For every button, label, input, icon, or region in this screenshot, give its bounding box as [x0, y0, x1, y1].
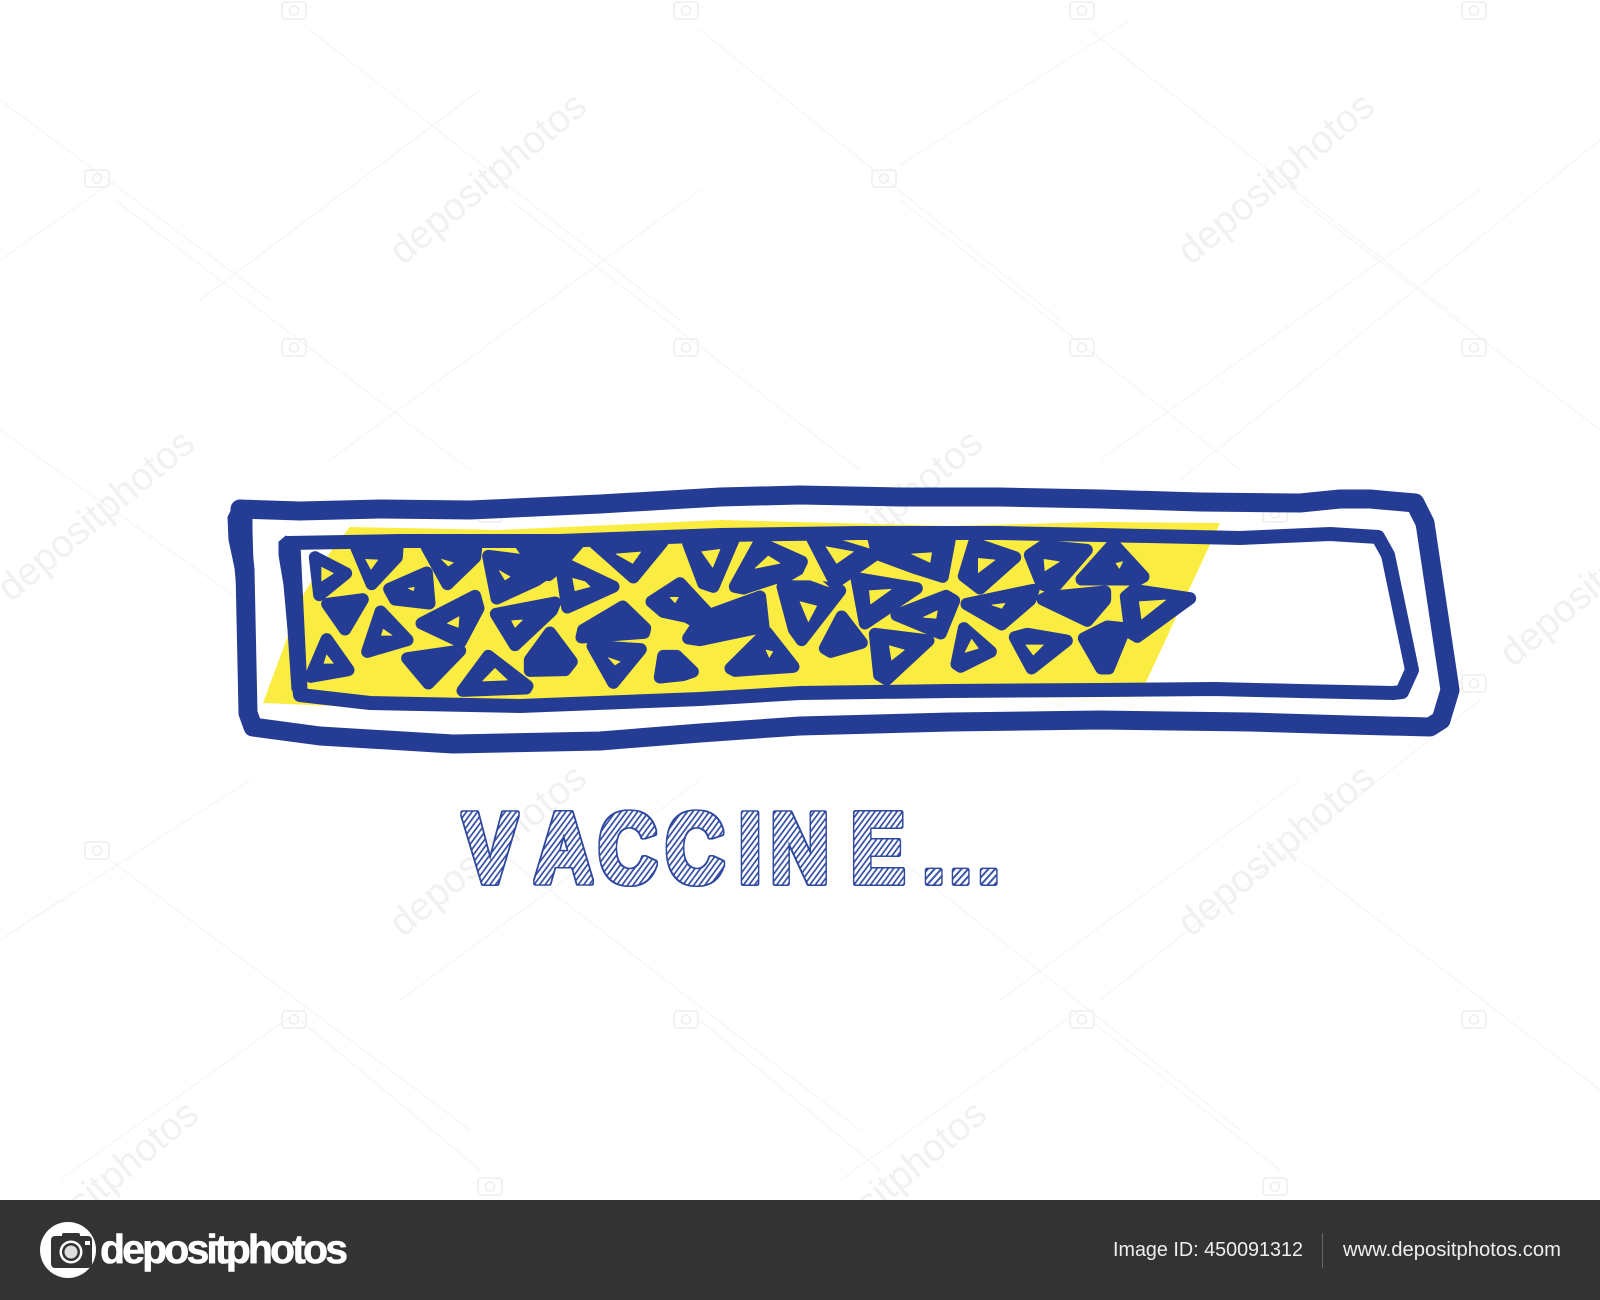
label: VACCINE: ...: [924, 819, 998, 897]
watermark layer: depositphotos: [381, 84, 595, 273]
yellow progress fill: [263, 520, 1220, 707]
watermark layer: depositphotos: [781, 1092, 995, 1281]
logo wordmark: depositphotos: [100, 1226, 348, 1272]
watermark layer: depositphotos: [777, 421, 991, 610]
virus holes: left half: [322, 549, 720, 681]
watermark layer: depositphotos: [381, 756, 595, 945]
image id: Image ID: 450091312: [1113, 1239, 1303, 1261]
progress bar: [228, 495, 1450, 744]
virus cluster: left half: [311, 540, 763, 691]
watermark layer: depositphotos: [1169, 84, 1383, 273]
label: VACCINE: VACCINE: [463, 793, 905, 903]
outer hand-drawn frame: [228, 495, 1450, 744]
virus cluster: right half: [731, 537, 1190, 679]
footer bar: [0, 1200, 1600, 1300]
watermark layer: depositphotos: [1169, 756, 1383, 945]
website url: www.depositphotos.com: [1342, 1239, 1561, 1261]
inner hand-drawn frame: [279, 533, 1412, 706]
virus holes: right half: [755, 547, 1166, 660]
icon: camera logo: [40, 1222, 96, 1278]
